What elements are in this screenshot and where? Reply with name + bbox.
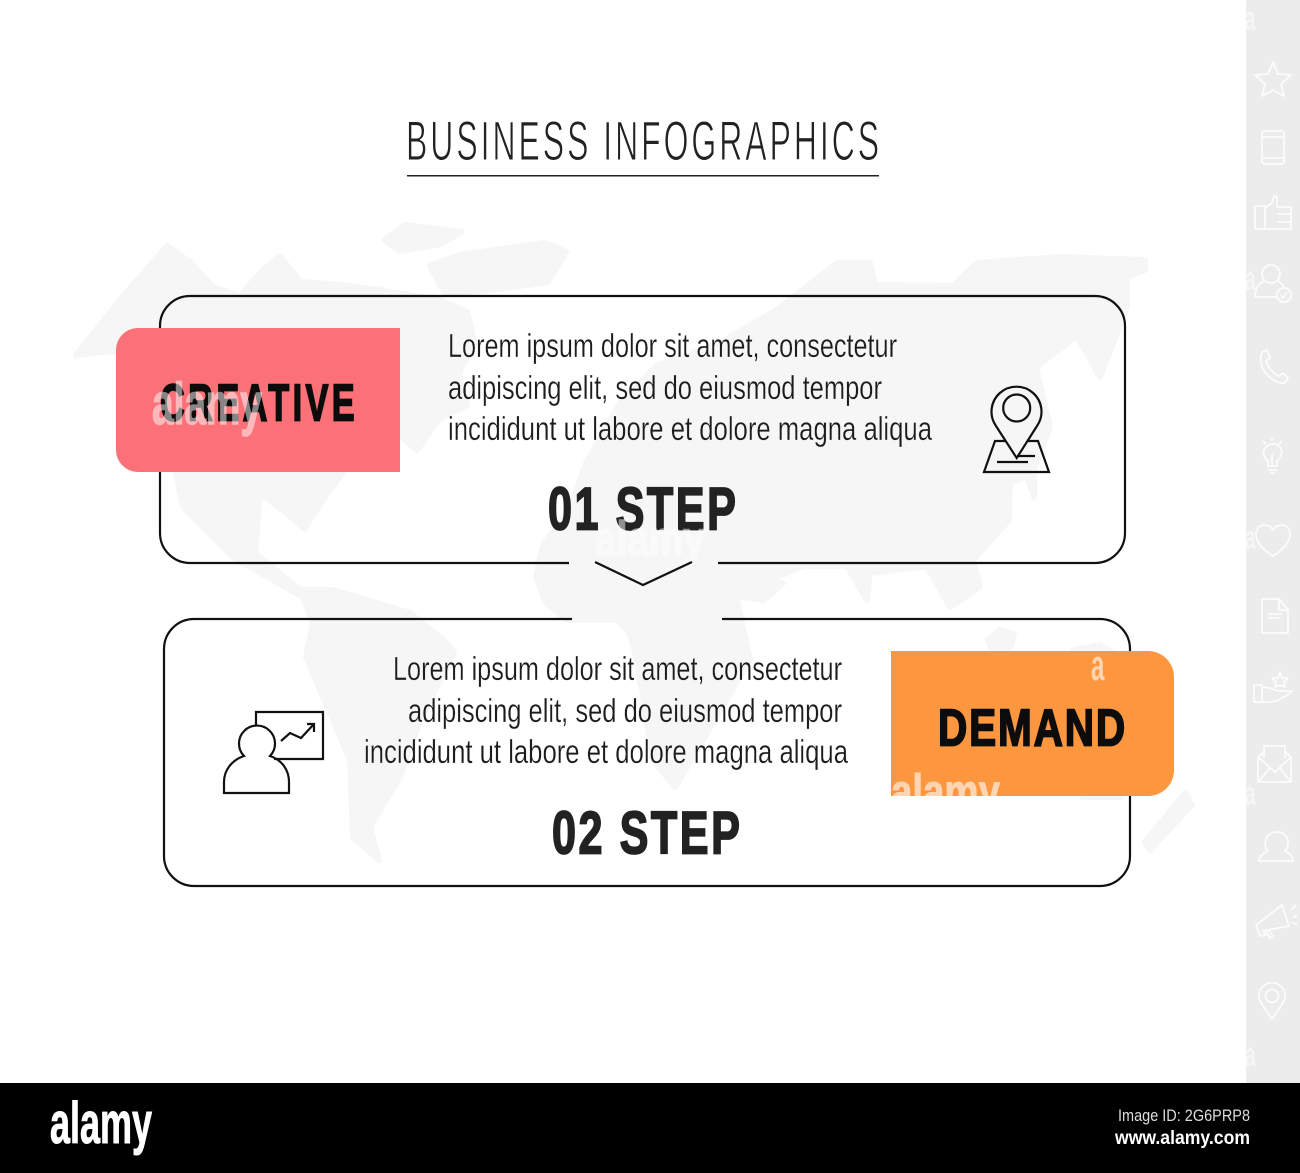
step 2 number: 02 STEP [552, 801, 740, 867]
footer logo: alamy [50, 1091, 152, 1156]
label: creative [116, 328, 400, 472]
sidebar watermark marks: a [1245, 1035, 1256, 1073]
icon: hand with star [1254, 672, 1292, 702]
icon: heart [1256, 525, 1290, 556]
step 2 description: incididunt ut labore et dolore magna aliqua [364, 733, 848, 770]
panel: step 2 [164, 619, 1174, 886]
icon: thumbs up [1255, 196, 1291, 229]
icon: megaphone [1256, 905, 1297, 938]
panel: step 1 [116, 296, 1125, 563]
footer website: www.alamy.com [1114, 1128, 1250, 1149]
icon: telephone [1261, 350, 1288, 383]
sidebar watermark marks [1245, 0, 1256, 1073]
step 2 description: Lorem ipsum dolor sit amet, consectetur [393, 650, 842, 687]
step 1 description: incididunt ut labore et dolore magna aliqua [448, 410, 932, 447]
sidebar watermark marks: a [1245, 259, 1256, 297]
label: creative: CREATIVE [160, 374, 355, 432]
step 1 description: Lorem ipsum dolor sit amet, consectetur [448, 327, 897, 364]
watermark over step 1: alamy [595, 513, 705, 566]
step 1 description [448, 327, 932, 447]
icon: light bulb [1263, 438, 1282, 473]
sidebar watermark marks: a [1245, 774, 1256, 812]
footer bar [0, 1083, 1300, 1173]
footer image id: Image ID: 2G6PRP8 [1118, 1106, 1250, 1125]
arrow: step 1 to step 2 [595, 562, 692, 585]
sidebar icons [1254, 62, 1297, 1019]
title: BUSINESS INFOGRAPHICS [406, 110, 879, 172]
label: demand [891, 640, 1174, 819]
sidebar [1245, 0, 1300, 1083]
icon: location pin [1259, 983, 1285, 1019]
panel outline: step 1 [160, 296, 1125, 563]
icon: presenter with chart [224, 712, 323, 793]
panel outline: step 2 [164, 619, 1130, 886]
label: demand: a [1091, 640, 1105, 690]
step 2 description [364, 650, 848, 770]
label: creative: alamy [152, 372, 262, 437]
background world map [76, 225, 1192, 860]
icon: user [1259, 832, 1293, 861]
sidebar watermark marks: a [1245, 518, 1256, 556]
sidebar watermark marks: a [1245, 0, 1256, 37]
icon: envelope [1258, 746, 1291, 782]
icon: user with check [1255, 265, 1291, 302]
step 1 description: adipiscing elit, sed do eiusmod tempor [448, 369, 882, 406]
label: demand: DEMAND [938, 699, 1125, 757]
step 1 number: 01 STEP [548, 477, 736, 543]
icon: star [1255, 62, 1291, 96]
step 2 description: adipiscing elit, sed do eiusmod tempor [408, 692, 842, 729]
icon: map pin [984, 387, 1049, 472]
icon: document [1262, 599, 1288, 633]
label: demand: alamy [891, 766, 1000, 819]
icon: smartphone [1262, 131, 1284, 164]
